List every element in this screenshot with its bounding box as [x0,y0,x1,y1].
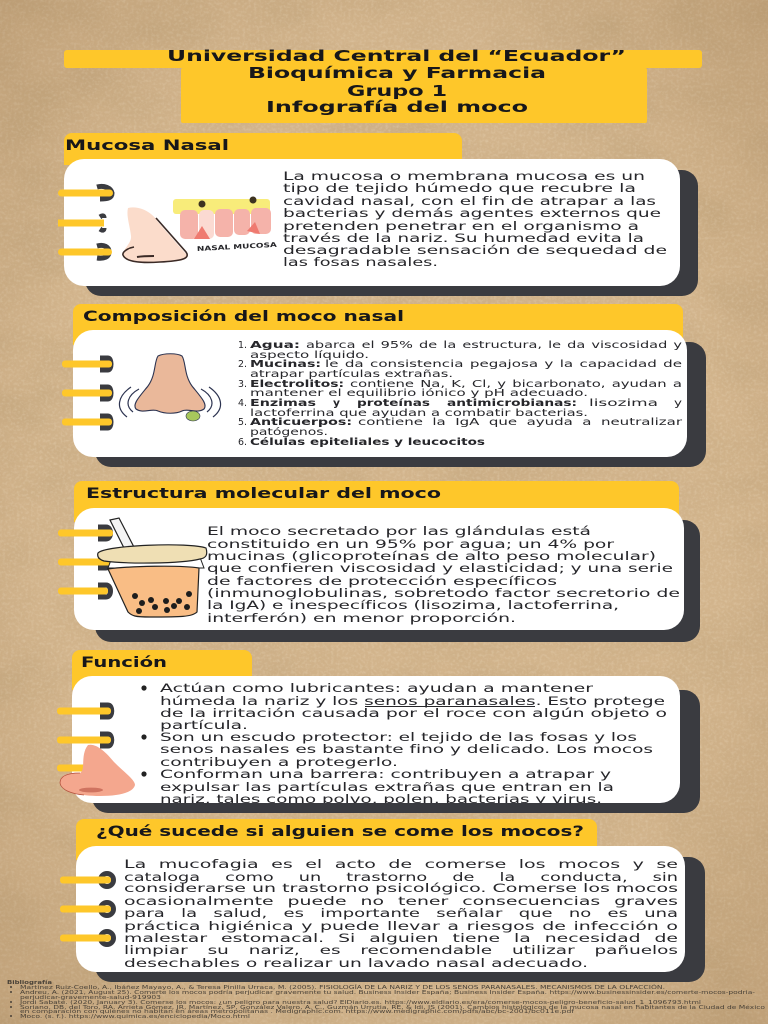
text: mucophagy explanation: cataloga como un trastorno de la conducta, sin [124,870,678,884]
list: composition of mucus: 6. [238,437,247,448]
text: mucus molecular structure [207,524,680,625]
bibliography: en comparación con quienes no habitan en áreas metropolitanas . Medigraphic.com. https://www.medigraphic.com/pdfs/abc/bc-2001/bc011e.pdf [20,1008,574,1015]
text: mucosa description: bacterias y demás agentes externos que [283,206,661,220]
text: function bullets [141,681,667,806]
panel: Mucosa Nasal [58,133,698,296]
panel: Composición del moco nasal [62,304,706,467]
list: composition of mucus: y [333,398,341,409]
title banner: Bioquímica y Farmacia [248,64,546,82]
list: composition of mucus: 3. [238,379,247,390]
binder rings [60,874,114,944]
text: function bullets: húmeda la nariz y los senos paranasales. Esto protege [160,694,665,708]
panel: ¿Qué sucede si alguien se come los mocos? [60,819,705,982]
text: mucophagy explanation: para la salud, es importante señalar que no es una [124,906,678,920]
text: function bullets: Actúan como lubricantes: ayudan a mantener [160,681,593,695]
text: mucus molecular structure: constituido en un 95% por agua; un 4% por [207,537,614,551]
list: composition of mucus: atrapar partículas extrañas. [250,368,453,380]
icon: orange nose [60,745,135,796]
bibliography: Andreu, A. (2021, August 25). Comerte los mocos podría perjudicar gravemente tu salud. Business Insider España; Business Insider España. https://www.businessinsider.es/comerte-mocos-podria- [20,989,755,996]
binder rings [57,705,115,772]
heading: ¿Qué sucede si alguien se come los mocos?: ¿Qué sucede si alguien se come los mocos? [96,824,584,840]
heading: Estructura molecular del moco: Estructura molecular del moco [86,486,442,502]
text: mucus molecular structure: interferón) en menor proporción. [207,611,516,625]
heading: Mucosa Nasal: Mucosa Nasal [65,138,229,154]
text: mucus molecular structure: que confieren viscosidad y elasticidad; y una serie [207,561,673,575]
panel: Estructura molecular del moco [58,481,700,642]
binder rings [62,358,112,428]
heading: Composición del moco nasal: Composición del moco nasal [83,309,404,325]
text: mucus molecular structure: (inmunoglobulinas, sobretodo factor secretorio de [207,586,680,600]
text: function bullets: Son un escudo protector: el tejido de las fosas y los [160,730,637,744]
text: mucophagy explanation: desechables o realizar un lavado nasal adecuado. [124,956,588,970]
list: composition of mucus: proteínas [357,397,430,409]
text: function bullets: contribuyen a protegerlo. [160,755,398,769]
icon: nasal mucosa diagram: NASAL MUCOSA [197,241,277,253]
list: composition of mucus: mantener el equilibrio iónico y pH adecuado. [250,387,588,399]
panel: Función [57,650,700,813]
list: composition of mucus: Electrolitos: [250,379,344,390]
text: mucus molecular structure: la IgA) e inespecíficos (lisozima, lactoferrina, [207,598,619,612]
text: mucus molecular structure: mucinas (glicoproteínas de alto peso molecular) [207,549,656,563]
bibliography: Jordi Sabaté. (2020, January 3). Comerse los mocos: ¿un peligro para nuestra salud? ElDiario.es. https://www.eldiario.es/era/comerse-mocos-peligro-beneficio-salud_1_1096793.html [18,999,701,1006]
list: composition of mucus: patógenos. [250,426,328,438]
text: mucosa description [283,169,667,269]
text: mucosa description: través de la nariz. Su humedad evita la [283,231,644,245]
text: mucosa description: pretenden penetrar en el organismo a [283,219,639,233]
text: mucophagy explanation: malestar estomacal. Si alguien tiene la necesidad de [124,931,678,945]
list: composition of mucus: 4. [238,398,247,409]
bibliography: Soriano, DB, del Toro, RA, Arrieta Gómez, JR, Martínez, SP, González Valero, A. C., Guzmán Urrutia, RE, & Idi, JS (2001). Cambios histológicos de la mucosa nasal en habitantes de la Ciudad de México [20,1004,765,1011]
text: mucosa description: La mucosa o membrana mucosa es un [283,169,645,183]
text: mucus molecular structure: de factores de protección específicos [207,574,557,588]
text: mucus molecular structure: El moco secretado por las glándulas está [207,524,591,538]
icon: bubble tea cup [98,518,207,617]
title banner [64,47,702,123]
list: composition of mucus: 1. [238,340,247,351]
text: mucosa description: las fosas nasales. [283,255,438,269]
binder rings [58,527,113,597]
list: composition of mucus: Mucinas: [250,359,321,370]
card shadow strip over text descenders [110,803,670,807]
text: function bullets: de la irritación causada por el roce con algún objeto o [160,706,667,720]
title banner: Grupo 1 [347,82,447,100]
text: mucophagy explanation [124,857,678,970]
list: composition of mucus: lactoferrina que ayudan a combatir bacterias. [250,408,588,419]
text: function bullets: partícula. [160,718,248,732]
text: mucosa description: tipo de tejido húmedo que recubre la [283,181,636,195]
list: composition of mucus: Enzimas [250,398,316,409]
list: composition of mucus: Agua: [250,340,300,351]
bibliography: perjudicar-gravemente-salud-919903 [20,995,161,1001]
text: mucophagy explanation: La mucofagia es el acto de comerse los mocos y se [124,857,678,871]
text: function bullets: nariz, tales como polvo, polen, bacterias y virus. [160,792,602,806]
text: mucophagy explanation: considerarse un trastorno psicológico. Comerse los mocos [124,881,678,895]
icon: nose profile [123,207,187,262]
icon: nasal mucosa diagram [173,196,277,253]
list: composition of mucus: y [674,398,682,409]
list: composition of mucus: 2. [238,359,247,370]
list: composition of mucus: contiene la IgA que ayuda a neutralizar [358,417,682,428]
list: composition of mucus: contiene Na, K, Cl, y bicarbonato, ayudan a [350,379,682,390]
text: mucophagy explanation: práctica higiénica y puede llevar a riesgos de infección o [124,919,678,933]
list: composition of mucus [238,340,682,448]
list: composition of mucus: aspecto líquido. [250,349,369,361]
text: function bullets: Conforman una barrera: contribuyen a atrapar y [160,767,611,781]
list: composition of mucus: abarca el 95% de la estructura, le da viscosidad y [306,340,682,351]
bibliography [7,979,765,1020]
bibliography: Moco. (s. f.). https://www.quimica.es/enciclopedia/Moco.html [20,1014,250,1020]
title banner: Infografía del moco [266,98,528,116]
text: mucosa description: cavidad nasal, con el fin de atrapar a las [283,194,656,208]
list: composition of mucus: le da consistencia pegajosa y la capacidad de [325,359,682,370]
icon: front nose with drop [119,354,221,421]
title banner: Universidad Central del “Ecuador” [167,47,626,65]
heading: Función: Función [81,655,167,671]
bibliography: Martínez Ruiz-Coello, A., Ibáñez Mayayo, A., & Teresa Pinilla Urraca, M. (2005). FISIOLOGÍA DE LA NARIZ Y DE LOS SENOS PARANASALES. MECANISMOS DE LA OLFACCIÓN. [20,984,665,991]
list: composition of mucus: Anticuerpos: [250,417,352,428]
text: function bullets: senos nasales es bastante fino y delicado. Los mocos [160,742,653,756]
bibliography: Bibliografía [7,979,52,986]
text: mucophagy explanation: ocasionalmente puede no tener consecuencias graves [124,894,678,908]
binder rings [58,186,113,258]
list: composition of mucus: 5. [238,417,247,428]
text: function bullets: expulsar las partículas extrañas que entran en la [160,780,614,794]
list: composition of mucus: antimicrobianas: [447,398,577,409]
text: mucophagy explanation: limpiar su nariz, es recomendable utilizar pañuelos [124,943,678,957]
list: composition of mucus: lisozima [589,398,658,409]
list: composition of mucus: Células epiteliales y leucocitos [250,436,485,448]
text: mucosa description: desagradable sensación de sequedad de [283,243,667,257]
